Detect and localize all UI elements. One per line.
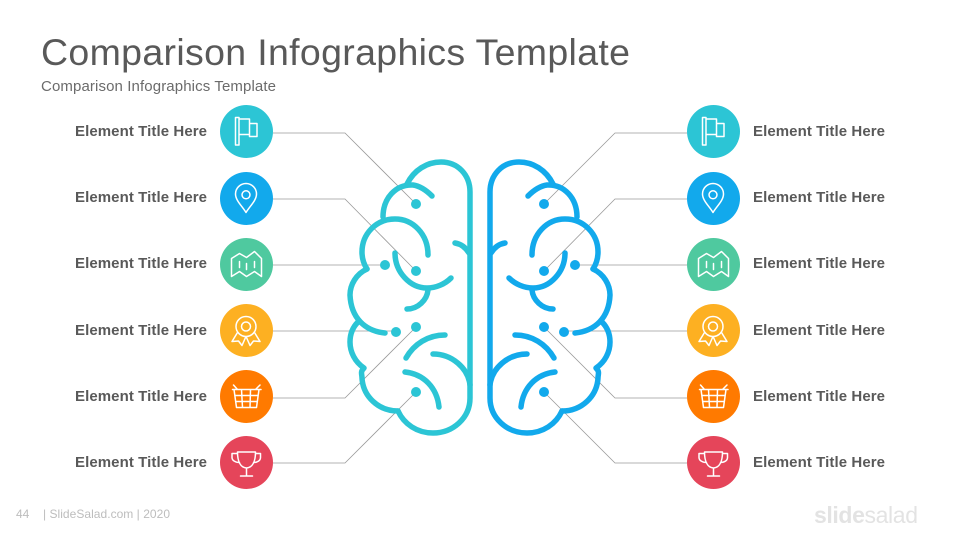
icon: medal right: [687, 304, 740, 357]
icon: medal left: [220, 304, 273, 357]
left labels: [75, 123, 207, 471]
icon: pin right: [687, 172, 740, 225]
right brain: [490, 162, 610, 433]
icon: trophy left: [220, 436, 273, 489]
right labels: Element Title Here: [753, 454, 885, 471]
icon: basket left: [220, 370, 273, 423]
left labels: Element Title Here: [75, 255, 207, 272]
connector lines: [273, 133, 687, 463]
right labels: Element Title Here: [753, 388, 885, 405]
title: Comparison Infographics Template: [41, 31, 630, 73]
right labels: Element Title Here: [753, 189, 885, 206]
left labels: Element Title Here: [75, 189, 207, 206]
right labels: Element Title Here: [753, 322, 885, 339]
icon: map left: [220, 238, 273, 291]
icon: trophy right: [687, 436, 740, 489]
left labels: Element Title Here: [75, 454, 207, 471]
footer source: | SlideSalad.com | 2020: [43, 507, 170, 521]
icon: flag right: [687, 105, 740, 158]
right labels: Element Title Here: [753, 123, 885, 140]
right labels: [753, 123, 885, 471]
subtitle: Comparison Infographics Template: [41, 78, 276, 95]
icon: pin left: [220, 172, 273, 225]
icon: basket right: [687, 370, 740, 423]
icon: flag left: [220, 105, 273, 158]
left labels: Element Title Here: [75, 388, 207, 405]
watermark logo: slidesalad: [814, 502, 918, 528]
left labels: Element Title Here: [75, 123, 207, 140]
left brain: [350, 162, 470, 433]
left labels: Element Title Here: [75, 322, 207, 339]
footer page number: 44: [16, 507, 30, 521]
icon: map right: [687, 238, 740, 291]
right labels: Element Title Here: [753, 255, 885, 272]
